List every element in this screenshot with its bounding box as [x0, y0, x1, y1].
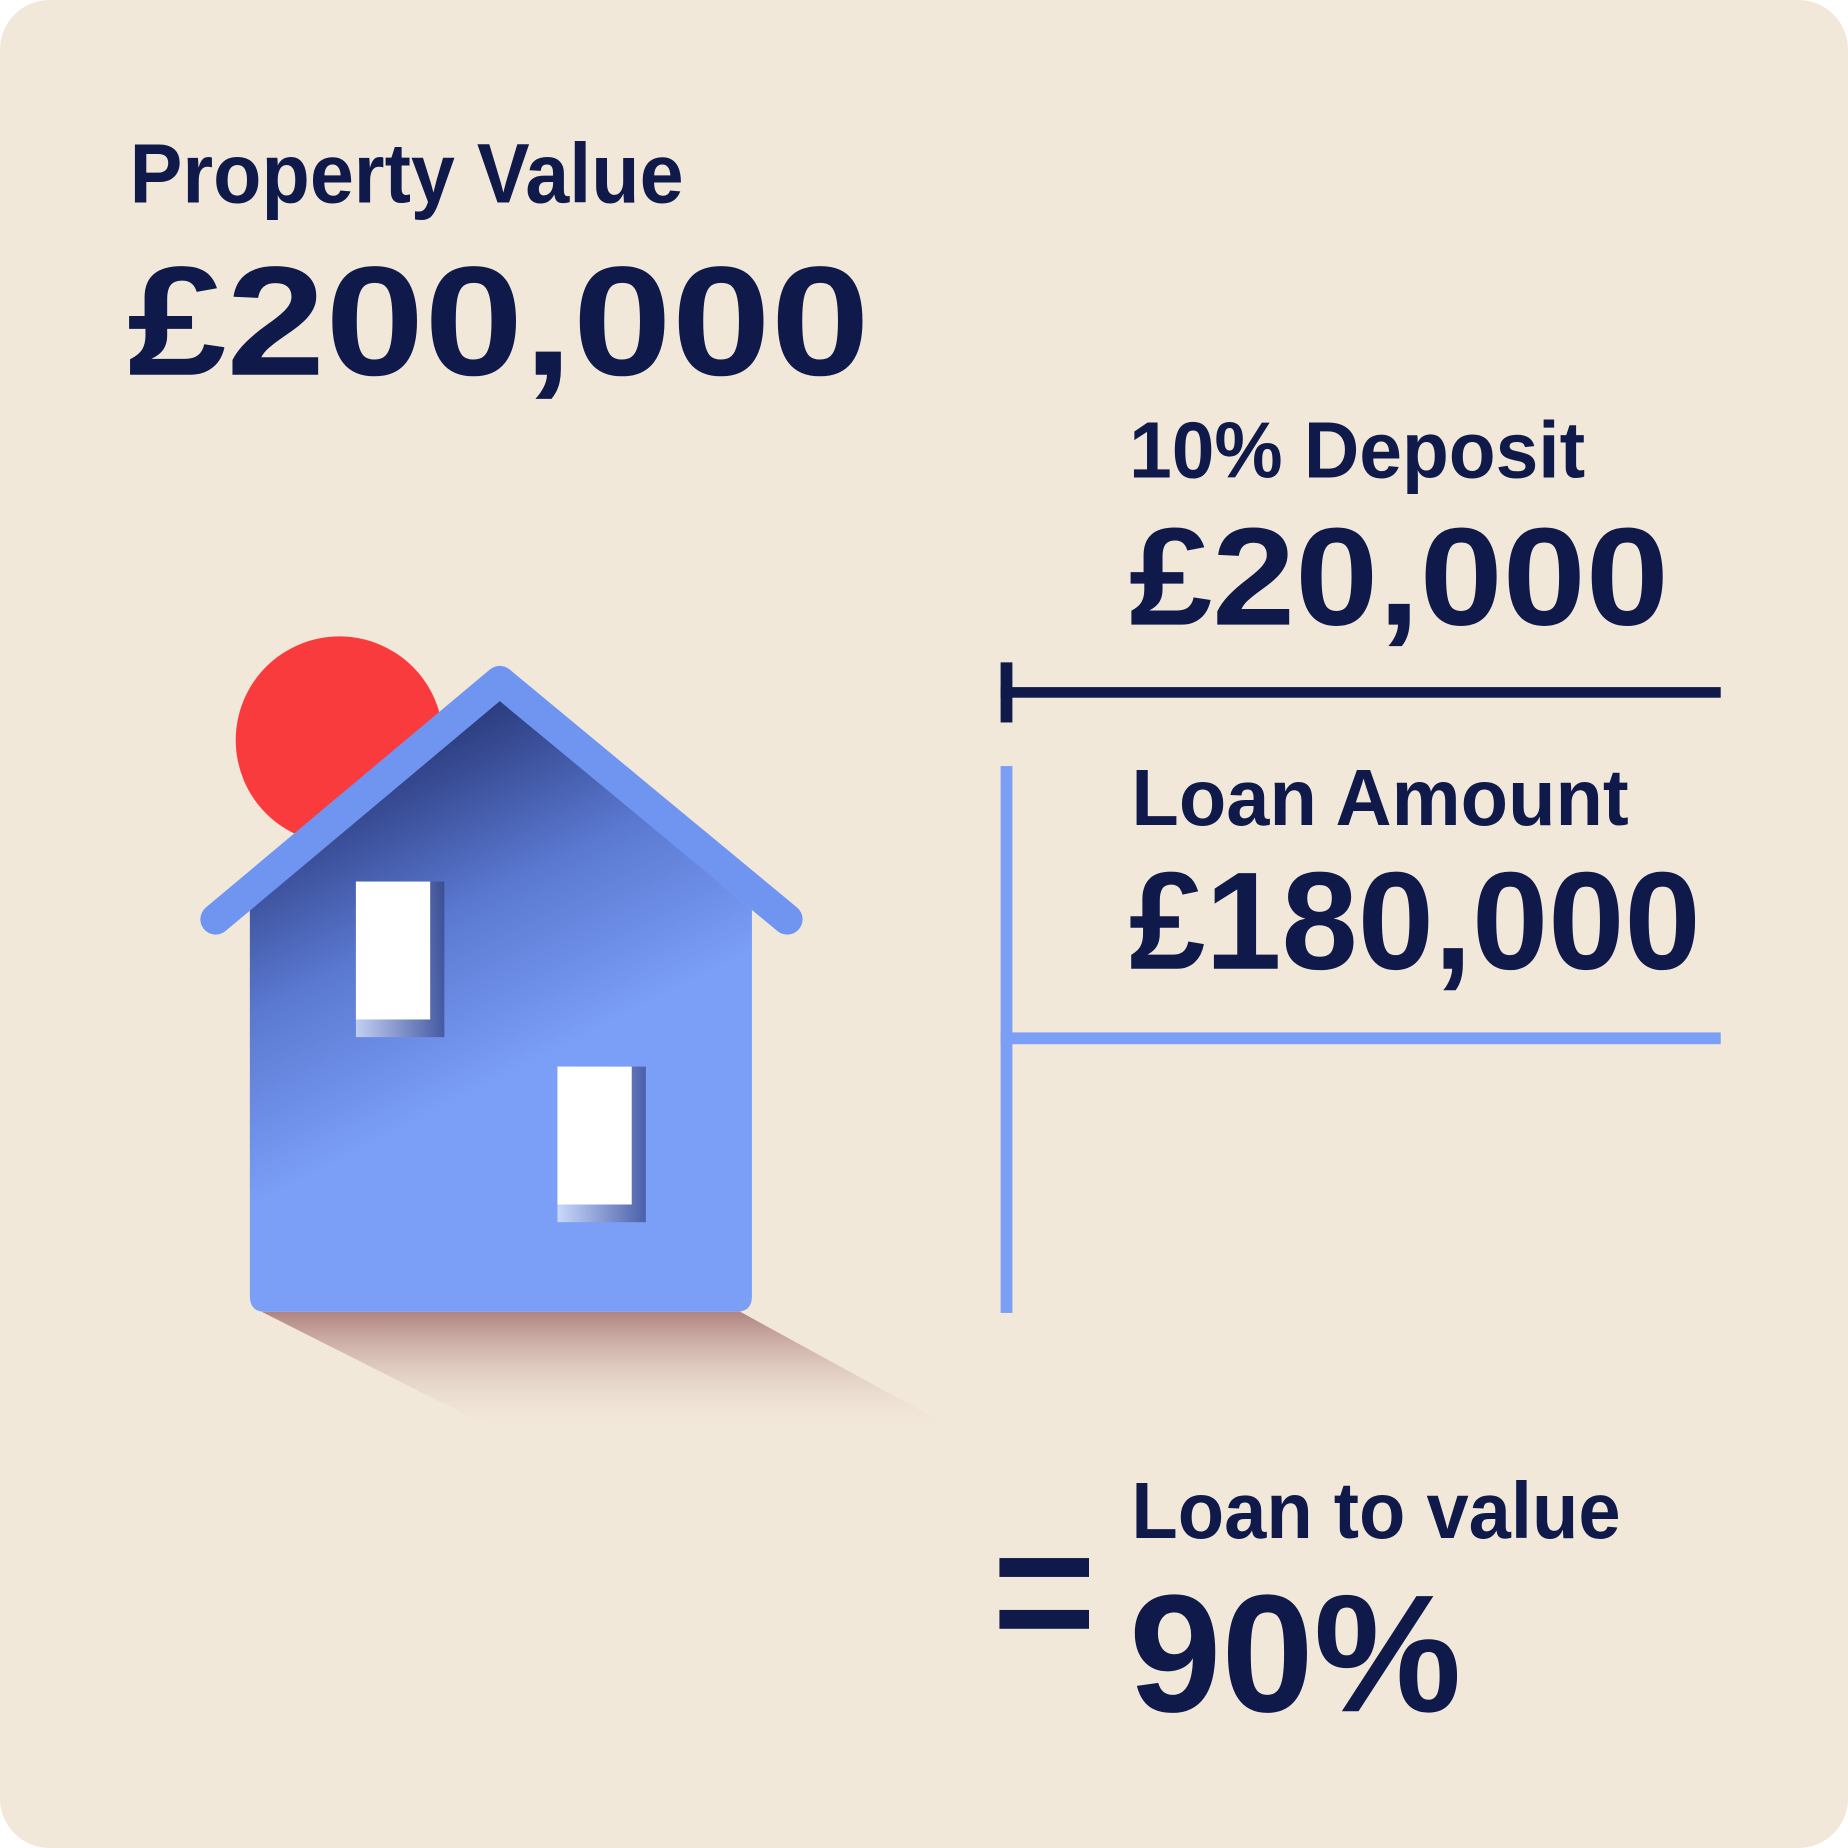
text block: loan to value	[1129, 1465, 1621, 1747]
text block: loan amount	[1129, 752, 1701, 999]
text block: deposit: £20,000	[1129, 500, 1669, 655]
house body	[250, 700, 752, 1312]
text block: loan to value: Loan to value	[1131, 1465, 1621, 1555]
window 1	[356, 882, 444, 1037]
title: property value	[127, 126, 870, 408]
loan bracket line	[1001, 766, 1721, 1313]
title: property value: Property Value	[130, 126, 684, 221]
house shadow	[262, 1312, 966, 1436]
text block: loan amount: £180,000	[1129, 844, 1701, 999]
red sun	[236, 636, 443, 844]
equals sign	[999, 1558, 1089, 1629]
roof	[216, 681, 787, 919]
text block: deposit: 10% Deposit	[1129, 404, 1585, 494]
icon: house	[216, 636, 966, 1436]
text block: loan to value: 90%	[1129, 1561, 1461, 1747]
text block: deposit	[1129, 404, 1669, 655]
window 2	[557, 1067, 646, 1222]
deposit bracket line	[1001, 662, 1721, 722]
text block: loan amount: Loan Amount	[1131, 752, 1629, 842]
title: property value: £200,000	[127, 234, 870, 408]
